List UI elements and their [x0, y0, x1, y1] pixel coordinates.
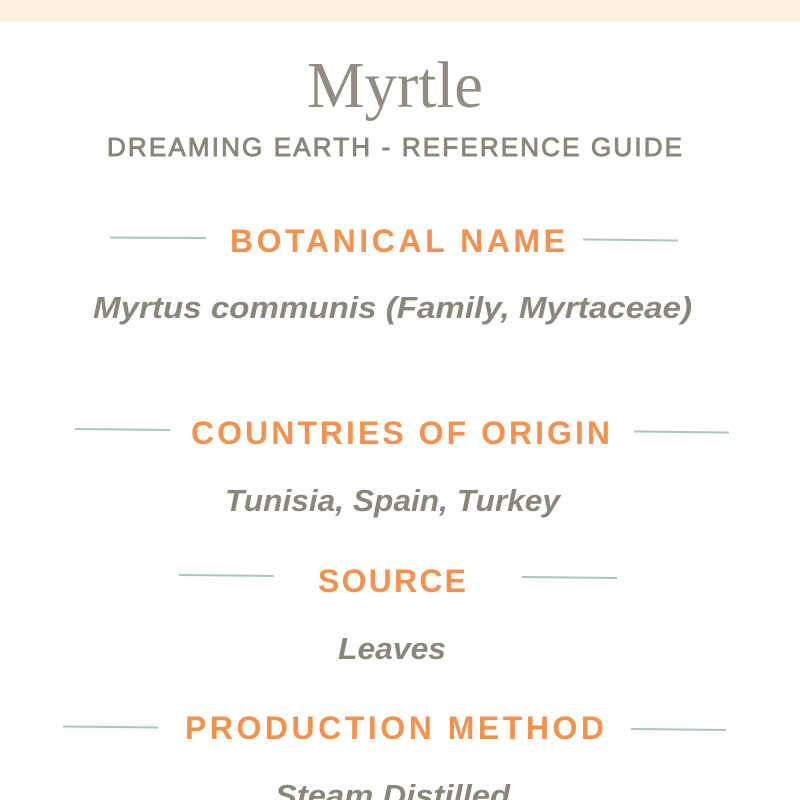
heading: source: SOURCE	[318, 563, 466, 599]
text: source value: Leaves	[338, 631, 446, 666]
subtitle: DREAMING EARTH - REFERENCE GUIDE	[107, 132, 682, 162]
title: Myrtle	[307, 49, 483, 122]
heading: botanical name: BOTANICAL NAME	[230, 223, 565, 259]
heading: countries of origin: COUNTRIES OF ORIGIN	[191, 415, 610, 451]
text: botanical name value: Myrtus communis (Family, Myrtaceae)	[93, 290, 692, 325]
text: countries value: Tunisia, Spain, Turkey	[225, 483, 562, 518]
heading: production method: PRODUCTION METHOD	[185, 710, 604, 746]
top band	[0, 0, 800, 22]
section: countries of origin	[75, 415, 729, 518]
section: production method	[63, 710, 726, 800]
section: source	[179, 563, 617, 666]
section: botanical name	[93, 223, 692, 325]
